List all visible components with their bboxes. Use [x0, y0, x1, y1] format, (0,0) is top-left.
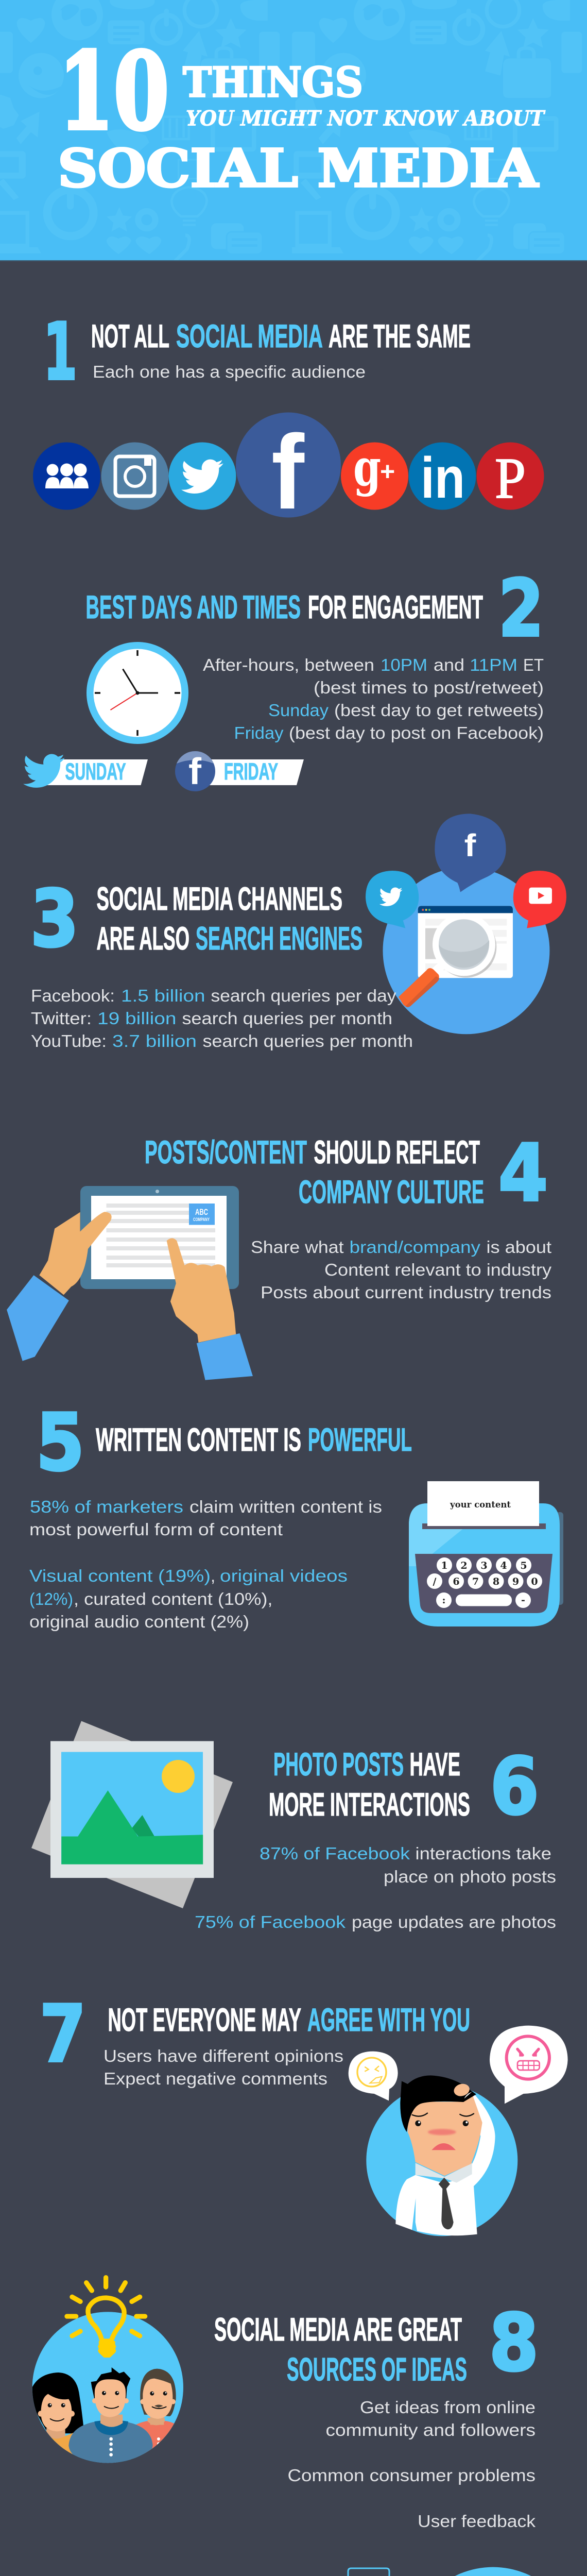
schedule text: Sunday: [268, 701, 329, 720]
keyboard: 0: [531, 1576, 538, 1587]
schedule text: 11PM: [470, 655, 517, 674]
written content text: (12%): [29, 1589, 73, 1608]
photo stats text: page updates are photos: [352, 1912, 556, 1931]
search stats text: Facebook:: [31, 986, 115, 1005]
badge: facebook friday: [175, 751, 304, 792]
number 5: 5: [36, 1397, 84, 1488]
written content text: [29, 1497, 382, 1631]
paper: your content: [450, 1500, 511, 1510]
bubble: angry face: [490, 2026, 568, 2104]
disagreement text: Expect negative comments: [103, 2069, 327, 2088]
heading 3: [97, 881, 362, 957]
browser window: [418, 906, 513, 978]
written content text: original audio content (2%): [29, 1612, 249, 1631]
subtitle 1: Each one has a specific audience: [93, 362, 366, 381]
ideas text: User feedback: [418, 2512, 536, 2531]
right man: [135, 2369, 177, 2456]
search stats text: Twitter:: [31, 1009, 92, 1028]
face: [408, 2093, 482, 2176]
keyboard: :: [442, 1595, 446, 1606]
icon: google plus: [341, 438, 408, 510]
bubble: twitter: [366, 871, 419, 928]
collar: [416, 2163, 472, 2183]
heading 2: BEST DAYS AND TIMES: [85, 589, 301, 625]
keyboard: 6: [453, 1576, 460, 1587]
culture text: Content relevant to industry: [324, 1260, 552, 1279]
disagreement text: Users have different opinions: [103, 2046, 343, 2065]
keyboard: -: [521, 1595, 525, 1606]
section 1: not all social media are the same: [33, 306, 544, 531]
photo stats text: [195, 1844, 556, 1931]
keyboard: 2: [460, 1560, 468, 1571]
keyboard: 9: [512, 1576, 519, 1587]
number 8: 8: [489, 2297, 539, 2388]
illustration: team and light bulb: [32, 2278, 183, 2466]
badge: facebook friday: FRIDAY: [224, 758, 278, 785]
illustration: search window and bubbles: [366, 814, 566, 1034]
section 7: disagreement: [40, 1989, 568, 2236]
section 6: photo posts: [31, 1721, 556, 1931]
title: you might not know about: YOU MIGHT NOT KNOW ABOUT: [186, 106, 546, 131]
illustration: tablet and hands: [7, 1186, 253, 1380]
icon: myspace: [33, 442, 100, 510]
illustration: crowd, chats and thumb: [348, 2567, 585, 2576]
number 4: 4: [498, 1127, 548, 1219]
culture text: Share what: [251, 1238, 344, 1257]
photo stats text: 75% of Facebook: [195, 1912, 346, 1931]
search stats text: 19 billion: [97, 1009, 176, 1028]
icon: twitter: [169, 442, 236, 510]
heading 1: NOT ALL: [91, 318, 169, 354]
written content text: most powerful form of content: [29, 1520, 283, 1539]
keyboard: 4: [500, 1560, 507, 1571]
tablet: ABC: [195, 1207, 208, 1217]
search stats text: search queries per month: [203, 1031, 413, 1050]
ideas text: Get ideas from online: [360, 2398, 536, 2417]
culture text: is about: [486, 1238, 551, 1257]
number 2: 2: [498, 563, 544, 654]
left hand: [7, 1212, 112, 1361]
schedule text: Friday: [234, 723, 284, 742]
photo stats text: interactions take: [415, 1844, 551, 1863]
center man: [68, 2367, 153, 2466]
heading 1: [91, 318, 471, 354]
icon: pinterest: [477, 442, 544, 511]
title: things: THINGS: [183, 58, 363, 106]
section 2: best days and times: [23, 563, 544, 792]
keyboard: 3: [480, 1560, 488, 1571]
heading 6: HAVE: [410, 1747, 460, 1783]
tablet: COMPANY: [193, 1217, 210, 1222]
culture text: [251, 1238, 552, 1302]
keyboard: 1: [441, 1560, 448, 1571]
badge: facebook friday: f: [188, 751, 202, 792]
number 7: 7: [40, 1989, 86, 2079]
illustration: worried man with bubbles: [349, 2026, 568, 2236]
written content text: 58% of marketers: [30, 1497, 183, 1516]
heading 7: AGREE WITH YOU: [307, 2002, 470, 2038]
icon: typewriter: [409, 1481, 563, 1626]
culture text: brand/company: [349, 1238, 481, 1257]
paper: [427, 1481, 539, 1526]
bubble: youtube: [513, 871, 566, 928]
bubble: facebook: [435, 814, 506, 892]
keyboard: 8: [493, 1576, 499, 1587]
search stats text: 3.7 billion: [112, 1031, 197, 1050]
written content text: ,: [211, 1566, 215, 1585]
ideas text: [287, 2398, 536, 2531]
number 3: 3: [30, 873, 79, 964]
heading 5: POWERFUL: [308, 1422, 412, 1458]
schedule text: [203, 655, 544, 742]
heading 3: SEARCH ENGINES: [196, 921, 362, 957]
written content text: , curated content (10%),: [74, 1589, 273, 1608]
heading 1: SOCIAL MEDIA: [176, 318, 323, 354]
schedule text: ET: [523, 655, 544, 674]
section 9: mentions: [24, 2567, 585, 2576]
search stats text: YouTube:: [31, 1031, 107, 1050]
hair: [400, 2075, 476, 2132]
icon: clock: [87, 642, 188, 744]
keyboard: /: [433, 1576, 437, 1587]
schedule text: and: [434, 655, 464, 674]
number 6: 6: [490, 1741, 539, 1832]
keyboard: 7: [472, 1576, 479, 1587]
icon: facebook: f: [271, 413, 305, 531]
bubble: annoyed face: [349, 2052, 398, 2100]
icon: linkedin: in: [421, 446, 465, 510]
right hand: [167, 1238, 253, 1380]
keyboard: [415, 1554, 553, 1613]
heading 6: [269, 1747, 470, 1823]
search stats text: search queries per month: [182, 1009, 392, 1028]
tie: [439, 2178, 454, 2229]
woman: [32, 2372, 84, 2460]
badge: twitter sunday: [23, 754, 148, 788]
icon: google plus: +: [380, 457, 395, 486]
shirt: [395, 2092, 495, 2235]
photo stats text: place on photo posts: [384, 1867, 556, 1886]
icon: facebook: [236, 412, 341, 531]
heading 3: SOCIAL MEDIA CHANNELS: [97, 881, 342, 917]
number 1: 1: [43, 306, 77, 398]
culture text: Posts about current industry trends: [261, 1283, 551, 1302]
heading 5: WRITTEN CONTENT IS: [96, 1422, 301, 1458]
heading 4: [145, 1134, 484, 1210]
search stats text: 1.5 billion: [121, 986, 205, 1005]
section 3: search engines: [30, 814, 566, 1050]
section 5: written content: [29, 1397, 563, 1631]
icon: instagram: [101, 442, 169, 510]
icon: pinterest: P: [495, 447, 526, 511]
tablet: [80, 1186, 239, 1289]
schedule text: (best day to get retweets): [334, 701, 544, 720]
icon: chat bubbles outline: [348, 2568, 409, 2576]
ideas text: Common consumer problems: [287, 2466, 536, 2485]
disagreement text: [103, 2046, 343, 2088]
written content text: Visual content (19%): [29, 1566, 211, 1585]
heading 1: ARE THE SAME: [329, 318, 471, 354]
badge: twitter sunday: SUNDAY: [65, 758, 126, 785]
bubble: facebook: f: [464, 828, 476, 863]
heading 8: [214, 2312, 467, 2387]
heading 3: ARE ALSO: [97, 921, 189, 957]
schedule text: (best times to post/retweet): [314, 678, 544, 697]
title: social media: SOCIAL MEDIA: [58, 138, 539, 199]
search stats text: search queries per day: [211, 986, 396, 1005]
header banner: [0, 0, 587, 261]
schedule text: 10PM: [381, 655, 427, 674]
title: 10: 10: [59, 30, 169, 154]
magnifying glass: [399, 913, 496, 1007]
ideas text: community and followers: [325, 2420, 536, 2439]
written content text: original videos: [220, 1566, 348, 1585]
icon: google plus: g: [353, 438, 381, 498]
written content text: claim written content is: [189, 1497, 382, 1516]
schedule text: After-hours, between: [203, 655, 374, 674]
search stats text: [31, 986, 413, 1050]
icon: light bulb: [67, 2278, 145, 2358]
keyboard: 5: [520, 1560, 527, 1571]
icon: photo frames: [31, 1721, 233, 1908]
section 8: sources of ideas: [32, 2278, 539, 2531]
heading 4: POSTS/CONTENT: [145, 1134, 307, 1171]
section 4: company culture: [7, 1127, 552, 1380]
photo stats text: 87% of Facebook: [260, 1844, 410, 1863]
heading 7: NOT EVERYONE MAY: [108, 2002, 301, 2038]
schedule text: (best day to post on Facebook): [289, 723, 544, 742]
heading 6: PHOTO POSTS: [273, 1747, 404, 1783]
